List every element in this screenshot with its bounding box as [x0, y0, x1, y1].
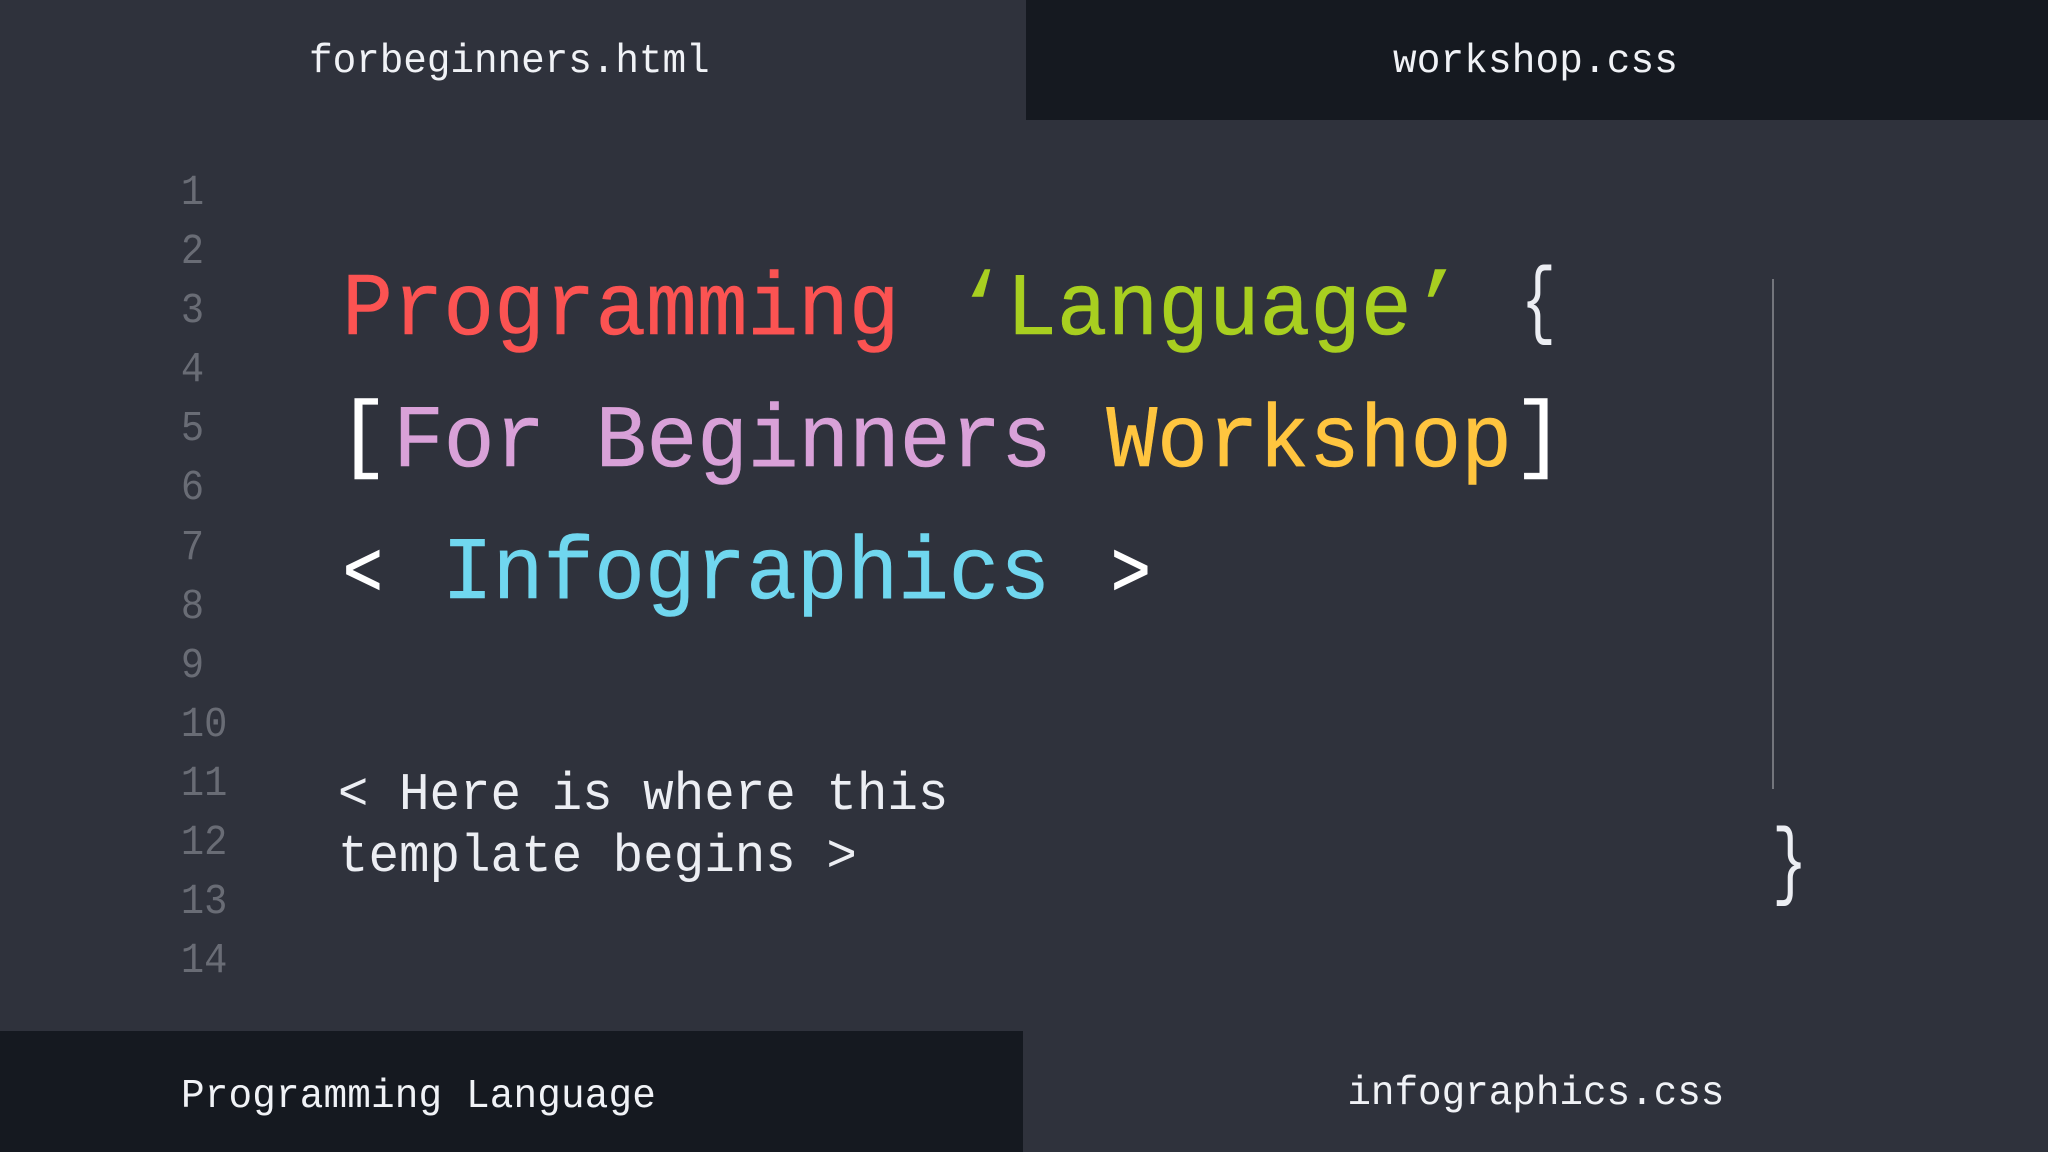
- title line 2: Workshop: [1106, 393, 1512, 494]
- title line 1: Programming: [342, 261, 899, 362]
- title line 1: {: [1521, 257, 1556, 354]
- line numbers: 6: [181, 464, 204, 513]
- tab: workshop.css: workshop.css: [1393, 39, 1678, 85]
- title line 2: ]: [1513, 389, 1565, 487]
- title line 1: ‘Language’: [955, 261, 1462, 362]
- line numbers: 11: [181, 760, 227, 809]
- title line 3: <: [343, 533, 383, 618]
- line numbers: 1: [181, 169, 204, 218]
- title line 2: [: [338, 389, 389, 487]
- subtitle: < Here is where this: [338, 765, 948, 825]
- line numbers: 14: [181, 937, 227, 986]
- title line 3: >: [1111, 533, 1151, 618]
- line numbers: 4: [181, 346, 204, 395]
- title line 3: Infographics: [442, 525, 1050, 626]
- title line 2: For Beginners: [393, 393, 1052, 494]
- tab: infographics.css: infographics.css: [1347, 1071, 1724, 1117]
- line numbers: 3: [181, 287, 204, 336]
- line numbers: 7: [181, 524, 204, 573]
- line numbers: 12: [181, 819, 227, 868]
- closing brace: }: [1772, 818, 1807, 915]
- line numbers: 8: [181, 583, 204, 632]
- line numbers: 9: [181, 642, 204, 691]
- tab: Programming Language: Programming Language: [181, 1074, 656, 1120]
- tab: forbeginners.html: forbeginners.html: [309, 39, 710, 85]
- title line 2: [338, 389, 1565, 494]
- line numbers: 5: [181, 405, 204, 454]
- line numbers: 13: [181, 878, 227, 927]
- title line 1: [342, 257, 1556, 362]
- vertical guide line: [1772, 279, 1774, 789]
- line numbers: 10: [181, 701, 227, 750]
- subtitle: [338, 765, 948, 887]
- subtitle: template begins >: [338, 827, 857, 887]
- tab: workshop.css: [1026, 0, 2048, 120]
- line numbers: 2: [181, 228, 204, 277]
- line numbers: [181, 169, 227, 986]
- tab: Programming Language: [0, 1031, 1023, 1152]
